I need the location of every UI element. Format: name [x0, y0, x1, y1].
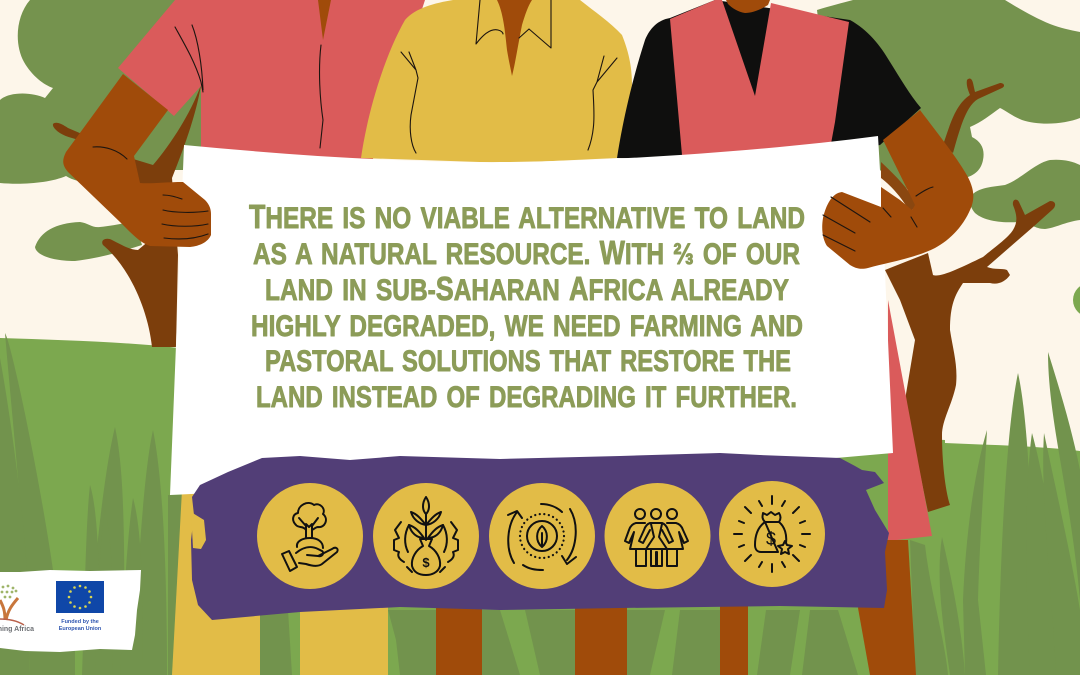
sign message: PASTORAL SOLUTIONS THAT RESTORE THE: [265, 345, 791, 378]
person: left, salmon shirt: [118, 0, 425, 675]
right tree: [817, 0, 1080, 512]
sign message: AS A NATURAL RESOURCE. WITH ⅔ OF OUR: [253, 234, 800, 271]
icon: hand holding tree: [257, 483, 363, 589]
grass blades: [0, 333, 1080, 675]
logo patch: [0, 570, 141, 652]
EU flag: [56, 581, 104, 613]
sign message: HIGHLY DEGRADED, WE NEED FARMING AND: [251, 310, 803, 343]
left tree: [0, 0, 205, 347]
right arm and hand: [822, 110, 973, 269]
EU caption: European Union: [59, 626, 102, 632]
person: right, black shirt and salmon vest: [436, 0, 932, 675]
icon: money bag with star and rays: [719, 481, 825, 587]
person: centre, yellow shirt: [361, 0, 632, 163]
sign message: LAND INSTEAD OF DEGRADING IT FURTHER.: [256, 381, 797, 414]
icon: plant and money bag in gear: $: [422, 555, 430, 570]
purple brush band: [191, 453, 889, 620]
EU caption: [59, 619, 102, 632]
white sign: [170, 136, 893, 495]
logo: tree: [0, 585, 24, 625]
sign message: LAND IN SUB-SAHARAN AFRICA ALREADY: [265, 270, 789, 307]
sign message: [249, 198, 805, 414]
icon: circular arrows around leaf: [489, 483, 595, 589]
sign message: THERE IS NO VIABLE ALTERNATIVE TO LAND: [249, 198, 805, 235]
ground: [0, 338, 1080, 675]
left arm and hand: [63, 74, 211, 247]
EU caption: Funded by the: [61, 619, 99, 625]
icon: money bag with star and rays: $: [766, 529, 776, 549]
icon: plant and money bag in gear: [373, 483, 479, 589]
torn yellow notch: [191, 512, 206, 549]
icon: three women: [604, 483, 710, 589]
